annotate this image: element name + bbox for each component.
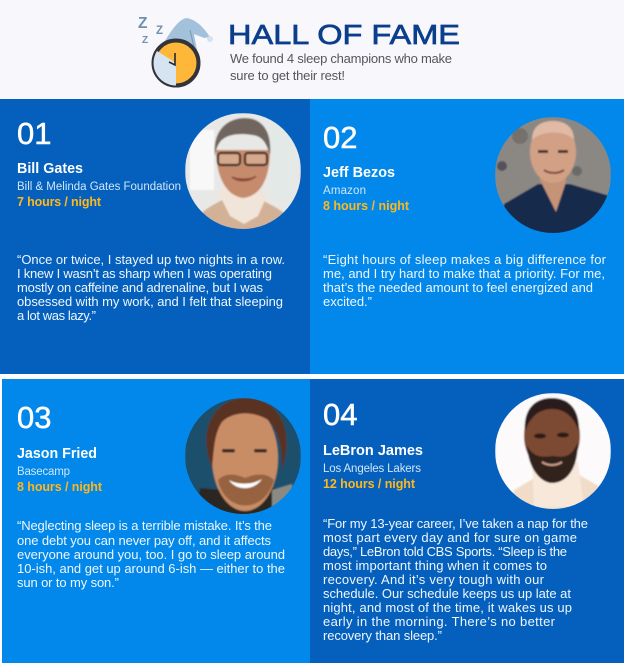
quote: recovery than sleep.” (323, 628, 442, 643)
icon: sleeping clock with nightcap (138, 15, 213, 86)
quote: mostly on caffeine and adrenaline, but I was (17, 280, 264, 295)
subtitle: We found 4 sleep champions who make (230, 51, 452, 66)
quote (17, 252, 285, 323)
panel: 03 Jason Fried (2, 379, 310, 663)
quote: sun or to my son.” (17, 575, 119, 590)
sleep hours: 7 hours / night (17, 195, 102, 209)
quote: me, and I try hard to make that a priority. For me, (323, 266, 605, 281)
quote: “For my 13-year career, I’ve taken a nap for the (323, 516, 588, 531)
panel: 01 Bill Gates (0, 99, 310, 374)
quote: night, and most of the time, it wakes us up (323, 600, 572, 615)
quote (323, 252, 607, 309)
quote: I knew I wasn’t as sharp when I was operating (17, 266, 272, 281)
quote: that’s the needed amount to feel energized and (323, 280, 593, 295)
name: Jeff Bezos (323, 165, 395, 181)
quote (17, 518, 285, 590)
quote: obsessed with my work, and I felt that sleeping (17, 294, 283, 309)
quote: “Neglecting sleep is a terrible mistake. It’s the (17, 518, 272, 533)
quote: 10-ish, and get up around 6-ish — either to the (17, 561, 285, 576)
number 01: 01 (17, 116, 51, 151)
header band (0, 0, 624, 99)
sleep hours: 12 hours / night (323, 477, 416, 491)
subtitle: sure to get their rest! (230, 68, 345, 83)
title: HALL OF FAME (228, 19, 460, 50)
portrait: Jason Fried (185, 398, 301, 516)
number 04: 04 (323, 397, 357, 432)
icon: sleeping clock with nightcap: Z (142, 35, 148, 46)
organisation: Bill & Melinda Gates Foundation (17, 181, 181, 193)
portrait: Bill Gates (185, 113, 301, 232)
quote: most important thing when it comes to (323, 558, 547, 573)
quote: excited.” (323, 294, 372, 309)
quote: days,” LeBron told CBS Sports. “Sleep is the (323, 544, 567, 559)
icon: sleeping clock with nightcap: Z (138, 15, 148, 32)
quote: most part every day and for sure on game (323, 530, 577, 545)
panel: 02 Jeff Bezos (310, 99, 624, 374)
panel: 04 LeBron James (310, 379, 624, 663)
quote: “Once or twice, I stayed up two nights in a row. (17, 252, 285, 267)
name: Bill Gates (17, 161, 83, 177)
name: LeBron James (323, 443, 423, 459)
quote: a lot was lazy.” (17, 308, 96, 323)
number 03: 03 (17, 400, 51, 435)
quote: “Eight hours of sleep makes a big difference for (323, 252, 607, 267)
icon: sleeping clock with nightcap: Z (156, 25, 163, 37)
sleep hours: 8 hours / night (17, 480, 103, 494)
quote: early in the morning. There’s no better (323, 614, 556, 629)
organisation: Los Angeles Lakers (323, 463, 421, 475)
quote: recovery. And it’s very tough with our (323, 572, 545, 587)
portrait: Jeff Bezos (495, 117, 612, 236)
sleep hours: 8 hours / night (323, 199, 410, 213)
organisation: Amazon (323, 185, 366, 197)
subtitle (230, 51, 452, 83)
quote: one debt you can never pay off, and it affects (17, 533, 272, 548)
quote: schedule. Our schedule keeps us up late at (323, 586, 571, 601)
name: Jason Fried (17, 446, 97, 462)
quote: everyone around you, too. I go to sleep around (17, 547, 285, 562)
portrait: LeBron James (495, 393, 611, 512)
organisation: Basecamp (17, 466, 70, 478)
quote (323, 516, 588, 643)
number 02: 02 (323, 120, 357, 155)
